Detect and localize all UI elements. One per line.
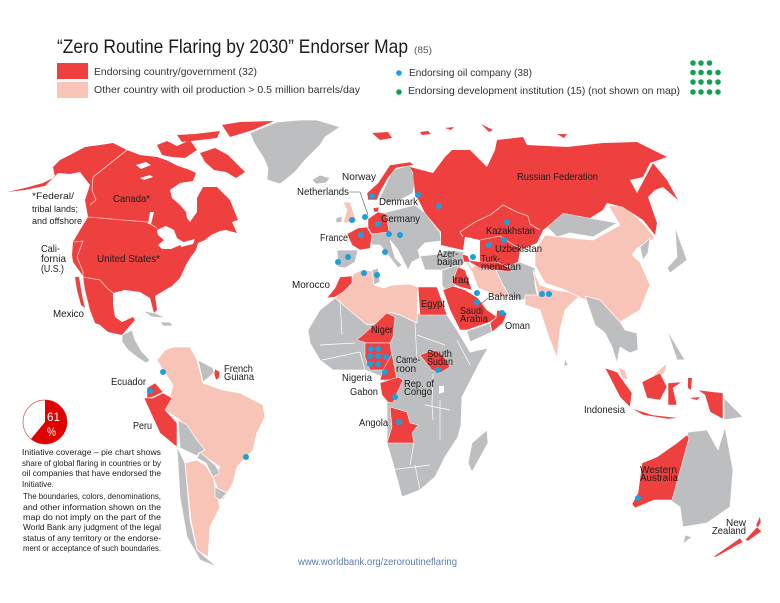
australia and new zealand — [632, 427, 762, 557]
peru — [144, 393, 177, 447]
map labels: Australia — [640, 472, 678, 484]
south america — [144, 347, 265, 567]
country lines — [320, 300, 470, 490]
europe — [336, 132, 465, 272]
map labels: Sudan — [427, 356, 453, 368]
map labels: Norway — [342, 171, 377, 183]
text block: disclaimer: and other information shown on the — [23, 503, 161, 512]
greenland and iceland — [250, 120, 340, 184]
legend dot: oil company — [396, 70, 402, 76]
arctic russia islands — [420, 124, 567, 138]
map labels: Oman — [505, 320, 530, 332]
arctic archipelago west — [157, 140, 197, 158]
text block: initiative coverage: Initiative coverage – pie chart shows — [22, 448, 161, 457]
map labels: Uzbekistan — [495, 243, 542, 255]
french guiana — [214, 369, 220, 380]
oman — [490, 310, 507, 332]
map labels: Bahrain — [488, 291, 521, 303]
niger — [357, 313, 395, 343]
guyanas — [198, 360, 214, 382]
baffin island — [200, 148, 245, 178]
map labels: Angola — [359, 417, 388, 429]
title: “Zero Routine Flaring by 2030” Endorser Map — [57, 36, 408, 58]
africa — [308, 268, 488, 497]
united kingdom — [343, 202, 358, 223]
map labels: Ecuador — [111, 376, 146, 388]
yemen — [467, 323, 492, 342]
new zealand north island — [745, 527, 762, 541]
sumatra — [605, 368, 632, 407]
map labels: Congo — [404, 386, 432, 398]
egypt — [418, 287, 447, 315]
map labels: Arabia — [460, 313, 488, 325]
legend swatch: endorsing country — [57, 63, 88, 79]
argentina — [185, 460, 220, 557]
text block: disclaimer: The boundaries, colors, denominations, — [23, 492, 161, 501]
madagascar — [468, 430, 488, 472]
text block: disclaimer: World Bank any judgment of the legal — [23, 523, 161, 532]
angola — [387, 407, 418, 443]
map labels: Western — [640, 464, 677, 476]
korea — [640, 238, 650, 260]
map labels: tribal lands; — [32, 204, 78, 214]
map labels: menistan — [481, 261, 521, 273]
website url: www.worldbank.org/zeroroutineflaring — [297, 556, 457, 568]
pie chart: 61% initiative coverage: 61 — [47, 410, 60, 424]
map labels: and offshore — [32, 216, 82, 226]
text block: initiative coverage — [22, 448, 162, 489]
map labels: Indonesia — [584, 404, 625, 416]
pie chart: 61% initiative coverage: % — [47, 425, 56, 439]
text block: disclaimer: ment or acceptance of such boundaries. — [23, 544, 161, 553]
sri lanka — [564, 358, 568, 367]
nigeria — [365, 343, 392, 370]
map labels: *Federal/ — [32, 191, 75, 201]
legend label: other oil producer: Other country with oil production > 0.5 million barrels/day — [94, 84, 361, 96]
china — [535, 205, 655, 322]
malaysia borneo — [646, 363, 667, 385]
japan — [667, 227, 687, 273]
map labels: Came- — [396, 354, 420, 366]
legend dot: development institution — [396, 89, 402, 95]
iran — [463, 258, 510, 297]
map labels: Russian Federation — [517, 171, 598, 183]
new zealand north tip — [756, 516, 761, 528]
legend label: development institution: Endorsing development institution (15) (not shown on map) — [408, 85, 680, 97]
map labels: (U.S.) — [41, 263, 64, 275]
maluku — [688, 378, 692, 390]
map labels: France — [320, 232, 348, 244]
map labels — [32, 171, 746, 537]
uruguay — [215, 487, 227, 500]
chile — [177, 447, 217, 567]
map labels: Guiana — [224, 371, 254, 383]
pakistan and afghanistan — [495, 262, 538, 300]
arctic archipelago north — [177, 131, 220, 142]
text block: disclaimer: status of any territory or the endorse- — [23, 534, 161, 543]
algeria and libya — [335, 270, 418, 325]
iraq — [452, 267, 472, 290]
cameroon — [380, 354, 397, 380]
map labels: Zealand — [712, 525, 746, 537]
map labels: French — [224, 363, 253, 375]
asia — [410, 124, 687, 367]
map labels: Iraq — [452, 274, 469, 286]
india — [525, 270, 590, 358]
map labels: Mexico — [53, 308, 84, 320]
saudi arabia — [443, 286, 497, 330]
map labels: Morocco — [292, 279, 330, 291]
north america: canada and united states — [7, 121, 274, 335]
legend label: oil company: Endorsing oil company (38) — [409, 67, 532, 79]
green dots: development institutions — [690, 60, 721, 95]
malaysia peninsula — [618, 367, 628, 380]
morocco — [327, 276, 352, 298]
map labels: Kazakhstan — [486, 225, 535, 237]
ireland — [336, 216, 342, 223]
kazakhstan border — [460, 205, 540, 250]
baja california — [75, 277, 85, 308]
brazil colombia venezuela argentina — [157, 347, 265, 500]
scandinavia — [380, 165, 415, 203]
tunisia — [372, 268, 380, 285]
continental europe — [368, 205, 441, 270]
norway — [367, 162, 414, 200]
text block: initiative coverage: Initiative. — [22, 480, 54, 489]
central america and caribbean — [122, 311, 173, 363]
ecuador — [147, 383, 163, 398]
java and lesser sunda — [631, 408, 680, 419]
map labels: Rep. of — [404, 378, 434, 390]
azerbaijan — [462, 254, 470, 262]
map labels: Saudi — [460, 305, 483, 317]
map labels: Niger — [371, 324, 393, 336]
map labels: New — [726, 517, 746, 529]
world map — [7, 120, 762, 567]
map labels: Turk- — [481, 253, 500, 265]
africa base — [308, 298, 488, 497]
map labels: Gabon — [350, 386, 378, 398]
papua indonesia — [698, 390, 723, 419]
svalbard — [372, 132, 392, 140]
south sudan — [420, 350, 450, 373]
map labels: fornia — [41, 253, 66, 265]
bolivia — [178, 420, 205, 456]
legend label: endorsing country: Endorsing country/government (32) — [94, 66, 257, 78]
map labels: Egypt — [421, 298, 445, 310]
text block: initiative coverage: share of global flaring in countries or by — [22, 459, 162, 468]
map labels: Denmark — [379, 196, 419, 208]
western australia — [632, 435, 689, 508]
australia — [670, 427, 733, 527]
middle east grey — [442, 265, 458, 293]
title: (85) — [414, 45, 432, 56]
philippines — [667, 330, 685, 360]
map labels: Peru — [133, 420, 152, 432]
caucasus and turkey — [420, 250, 465, 272]
lakes — [136, 162, 195, 249]
papua new guinea — [724, 398, 743, 420]
small islands — [690, 397, 700, 400]
map labels: roon — [396, 363, 416, 375]
pie chart: 61% initiative coverage — [23, 400, 67, 444]
map labels: United States* — [97, 253, 160, 265]
sulawesi — [668, 382, 682, 405]
map labels: Netherlands — [297, 186, 349, 198]
legend swatch: other oil producer — [57, 82, 88, 98]
denmark — [373, 207, 379, 212]
kalimantan — [642, 373, 667, 400]
new zealand south island — [713, 538, 743, 557]
map labels: Azer- — [437, 248, 458, 260]
map labels: Germany — [381, 213, 421, 225]
map labels: Nigeria — [342, 372, 372, 384]
netherlands and bahrain leader lines — [349, 192, 488, 304]
gabon and congo — [380, 377, 403, 403]
map labels: Cali- — [41, 243, 60, 255]
germany and netherlands — [368, 212, 389, 234]
map labels: South — [427, 348, 452, 360]
southeast asia — [585, 296, 638, 363]
text block: initiative coverage: oil companies that have endorsed the — [22, 469, 161, 478]
caspian sea — [463, 237, 480, 268]
russia and kazakhstan — [410, 137, 678, 265]
turkmenistan and uzbekistan south — [466, 260, 512, 272]
country borders — [74, 150, 157, 293]
text block: disclaimer: map do not imply on the part of the — [23, 513, 161, 522]
france — [347, 227, 372, 250]
map labels: Canada* — [113, 193, 150, 205]
paraguay — [197, 452, 220, 477]
iberia — [337, 250, 358, 268]
tasmania — [683, 535, 692, 544]
ellesmere island — [222, 121, 274, 137]
oil company dots — [147, 192, 641, 501]
indonesia and malaysia — [605, 363, 743, 420]
legend — [57, 63, 680, 98]
text block: disclaimer — [23, 492, 161, 553]
map labels: baijan — [437, 256, 463, 268]
mongolia — [547, 213, 617, 237]
